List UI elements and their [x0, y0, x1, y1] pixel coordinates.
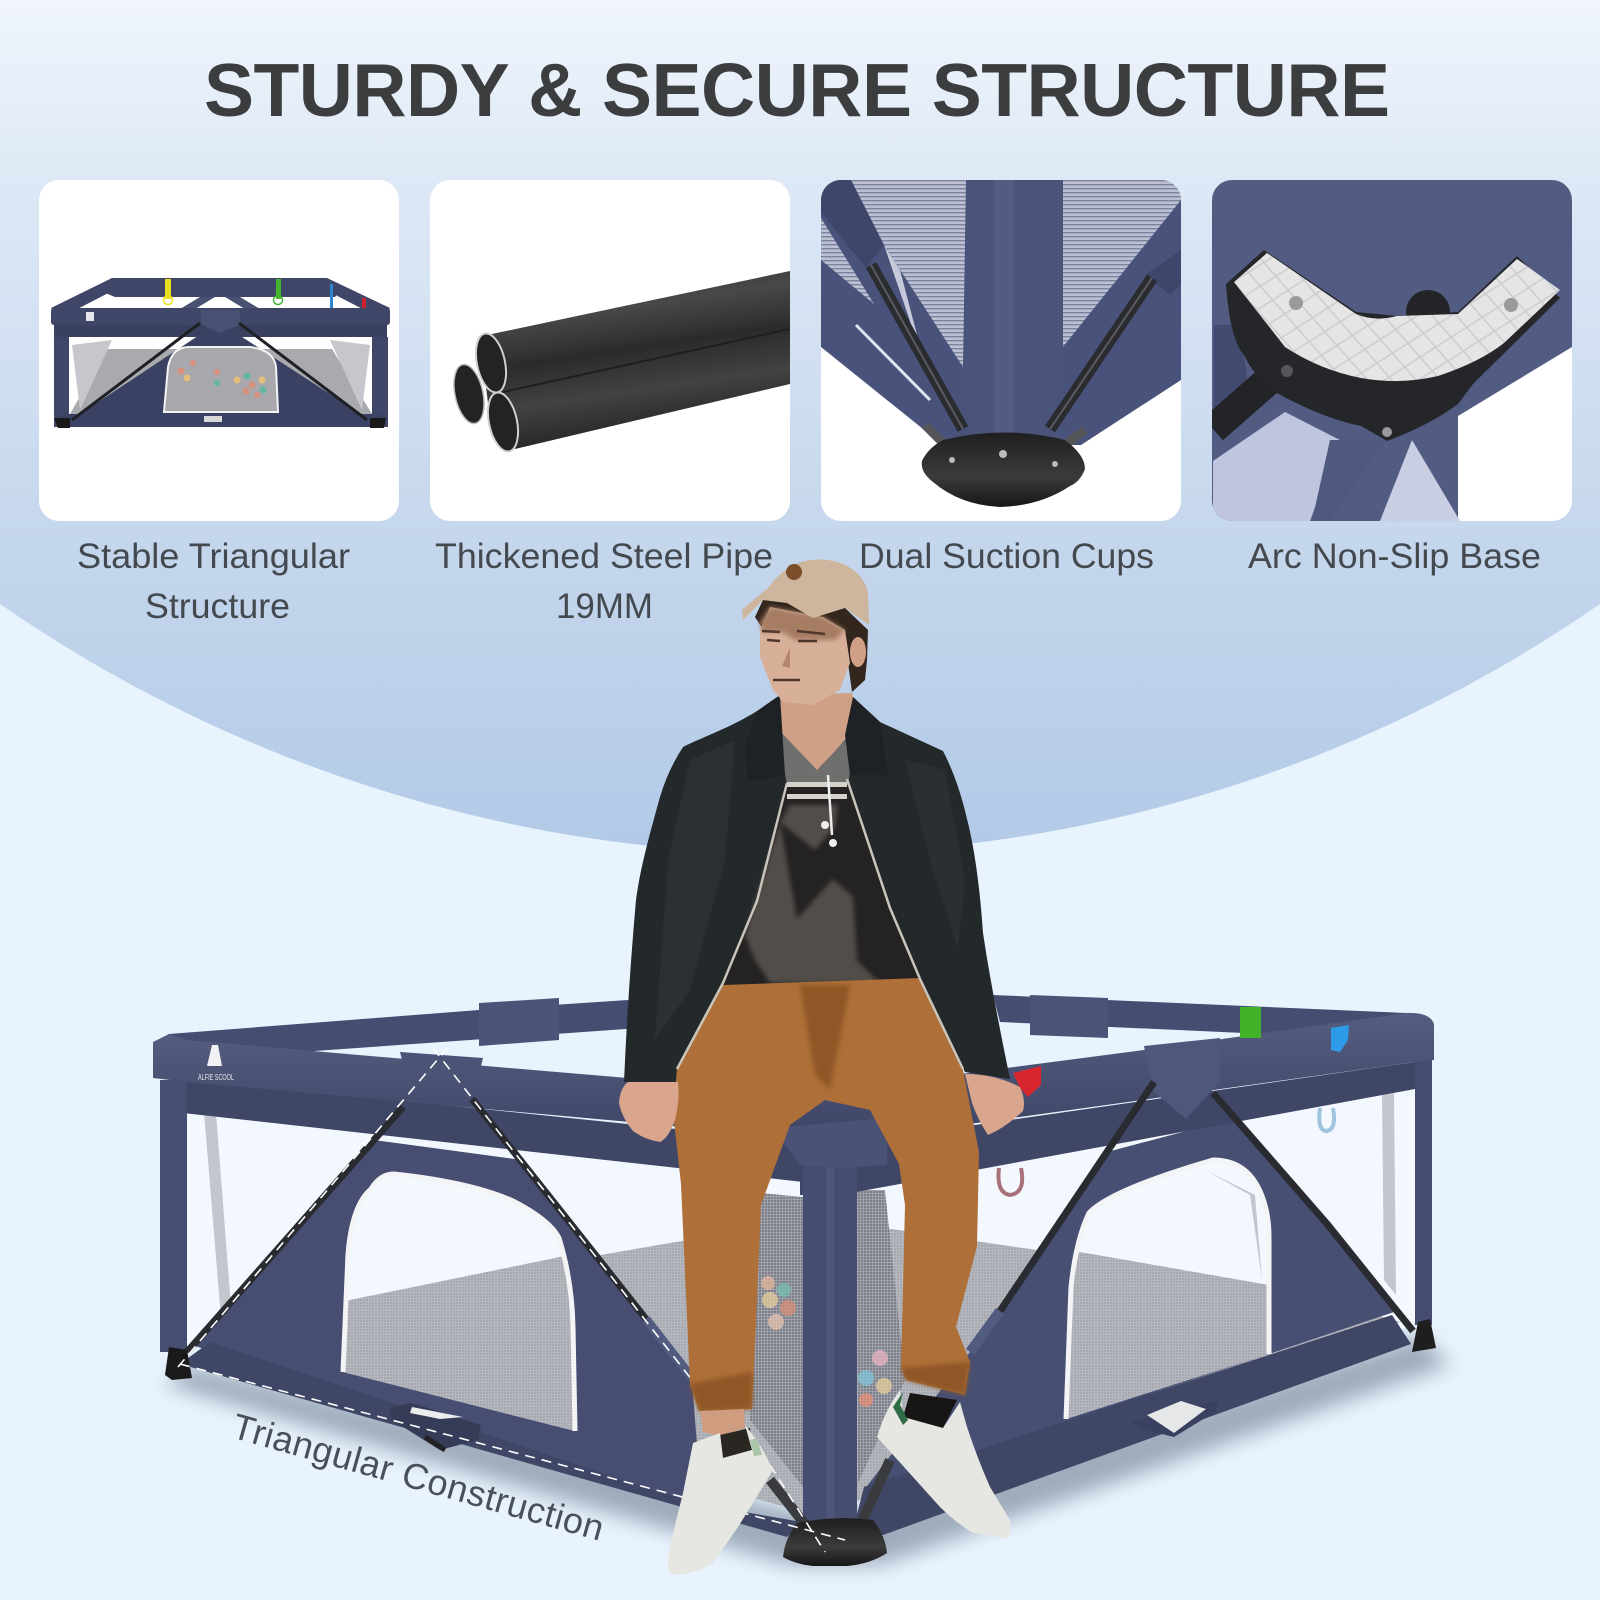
right front rail: [800, 1013, 1434, 1142]
steel pipes illustration: [449, 271, 790, 454]
right post: [1415, 1055, 1432, 1325]
jacket highlights: [655, 740, 735, 1040]
caption: stable triangular structure: Structure: [145, 587, 290, 626]
title: STURDY & SECURE STRUCTURE: [204, 48, 1390, 132]
right lower rod sleeve: [970, 1311, 1000, 1352]
sweater: [723, 783, 920, 986]
right zipper pocket: [1131, 1401, 1218, 1437]
jacket collars: [745, 695, 888, 782]
shirt collar and stripes: [777, 728, 857, 847]
hanging rings: [998, 1168, 1022, 1195]
left lower band: [183, 1078, 830, 1185]
right window: [1068, 1162, 1269, 1418]
nose shadow: [782, 648, 790, 668]
jacket zippers: [677, 779, 963, 1069]
pants shading: [690, 985, 970, 1411]
left triangular panel: [192, 1140, 702, 1510]
dashed triangle guide lines: [178, 1046, 845, 1552]
right sock: [903, 1393, 957, 1428]
centre post: [803, 1150, 857, 1525]
play balls: [761, 1276, 892, 1407]
caption: arc non-slip base: Arc Non-Slip Base: [1248, 537, 1541, 576]
left face opening: [187, 1082, 802, 1500]
centre foot: [783, 1518, 887, 1566]
left foot: [165, 1347, 192, 1380]
back rails: [169, 995, 1406, 1060]
background arc panel: [0, 0, 1600, 854]
face shadow under cap: [760, 607, 845, 640]
jacket: [624, 697, 1010, 1084]
caption: stable triangular structure: Stable Triangular: [77, 537, 350, 576]
right top patch: [1144, 1038, 1220, 1119]
floor mesh: [200, 1218, 1400, 1515]
left top patch: [400, 1052, 483, 1078]
corner foot photo: [821, 180, 1181, 507]
colored hooks: [1013, 1007, 1349, 1097]
caption: dual suction cups: Dual Suction Cups: [859, 537, 1154, 576]
right sneaker: [877, 1390, 1011, 1538]
caption: thickened steel pipe: [435, 537, 773, 626]
left ankle: [700, 1409, 745, 1436]
pants: [673, 978, 979, 1411]
panel: thickened steel pipe: [430, 180, 790, 521]
arc base photo: [1212, 180, 1572, 521]
left sneaker heel tab: [750, 1438, 762, 1456]
left post: [160, 1080, 187, 1352]
left front rail: [153, 1034, 840, 1140]
ear: [850, 637, 866, 667]
cap: [742, 560, 869, 625]
panel: arc non-slip base: [1212, 180, 1572, 521]
facial features: [762, 631, 825, 680]
back mesh: [203, 1100, 232, 1330]
right foot: [1412, 1319, 1436, 1352]
cap button: [786, 564, 802, 580]
left sock: [720, 1428, 752, 1458]
right sneaker heel tab: [893, 1392, 908, 1425]
left window: [343, 1176, 572, 1430]
person sitting on the playpen: [619, 560, 1024, 1575]
right hand: [965, 1074, 1024, 1135]
triangular construction label: Triangular Construction: [228, 1405, 609, 1549]
left bottom rail: [180, 1342, 802, 1537]
caption: stable triangular structure: [77, 537, 350, 626]
left diagonal rods: [187, 1099, 646, 1352]
corner sleeve: [772, 1118, 887, 1168]
face: [760, 607, 850, 705]
hair back: [755, 600, 868, 692]
right lower band: [800, 1062, 1415, 1195]
playpen: [153, 995, 1436, 1566]
sweater lit area: [745, 805, 880, 983]
right bottom rail: [855, 1315, 1411, 1535]
playpen shadow: [165, 1335, 1450, 1565]
left lower rod sleeve: [646, 1319, 692, 1378]
right diagonal rods: [1000, 1082, 1413, 1331]
brand logo: ALFIE SCOOL: [198, 1073, 234, 1082]
centre rods: [770, 1460, 890, 1527]
panel: stable triangular structure: [39, 180, 399, 521]
caption: thickened steel pipe: Thickened Steel Pipe: [435, 537, 773, 576]
caption: thickened steel pipe: 19MM: [556, 587, 653, 626]
neck: [778, 693, 858, 772]
left hand: [619, 1082, 678, 1142]
right face opening: [846, 1089, 1415, 1487]
right triangular panel: [864, 1118, 1397, 1490]
left zipper pocket: [389, 1403, 481, 1450]
brand logo: [198, 1045, 234, 1082]
mini playpen photo: [51, 278, 390, 428]
panel: dual suction cups: [821, 180, 1181, 521]
left sneaker: [668, 1425, 773, 1575]
